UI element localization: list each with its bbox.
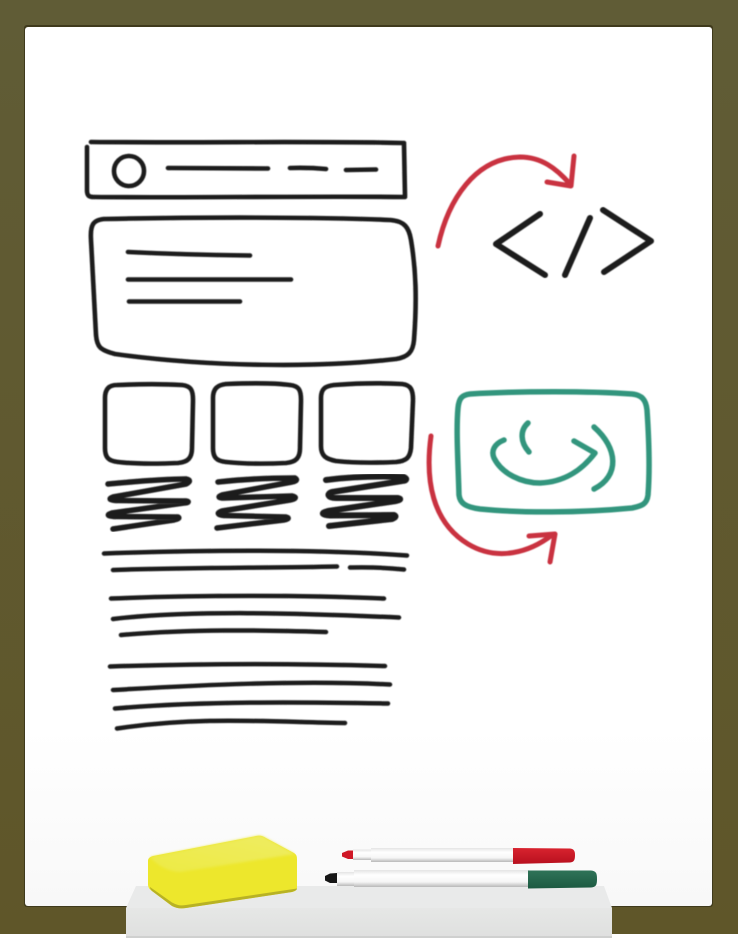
green marker xyxy=(325,870,597,888)
card 1 image xyxy=(105,384,193,464)
icon: code brackets xyxy=(496,210,651,275)
hero text lines xyxy=(128,252,291,302)
caption scribble 2 xyxy=(217,478,296,528)
red marker xyxy=(342,848,575,864)
caption scribble 3 xyxy=(323,477,406,526)
red arrow to code icon xyxy=(438,156,574,246)
hero panel xyxy=(91,218,416,365)
sketched web page wireframe xyxy=(87,142,416,464)
header bar xyxy=(87,142,405,197)
card 3 image xyxy=(321,383,413,463)
paragraph 1 xyxy=(104,551,407,570)
red arrow to video icon xyxy=(429,436,555,562)
icon: video player xyxy=(457,392,649,512)
navigation lines xyxy=(168,168,376,170)
marker tray xyxy=(126,886,612,938)
caption scribble 1 xyxy=(108,479,189,529)
card 2 image xyxy=(213,383,301,464)
scribbled card captions xyxy=(108,477,406,529)
eraser xyxy=(148,836,297,908)
paragraph 2 xyxy=(111,596,399,635)
paragraph 3 xyxy=(110,664,390,728)
article text lines xyxy=(104,551,407,728)
logo circle xyxy=(114,156,144,186)
